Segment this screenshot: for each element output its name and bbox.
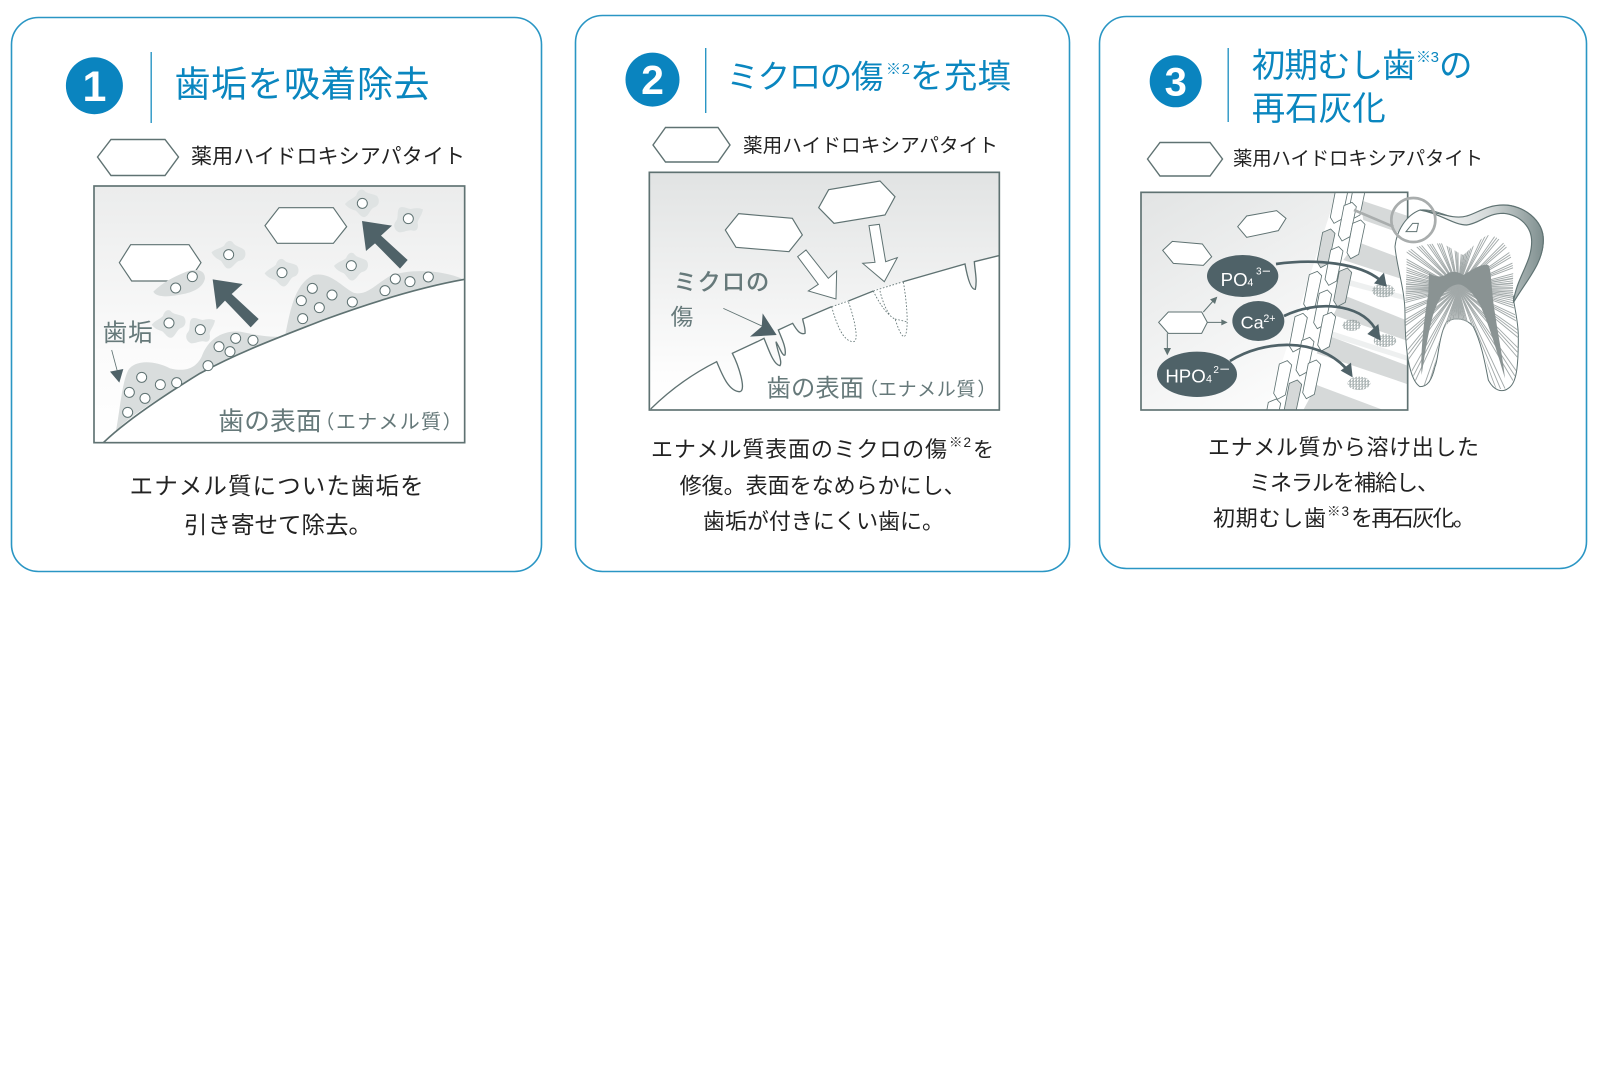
particles 3 [1163, 241, 1212, 265]
enamel with scratches [651, 256, 999, 409]
number badge 3: 3 [1165, 60, 1187, 104]
body text 2: 修復。表面をなめらかにし、 [680, 474, 966, 498]
label: tooth surface: エナメル質 [336, 411, 441, 434]
body text 3: 初期むし歯 [1213, 506, 1326, 531]
legend: hydroxyapatite 3: 薬用ハイドロキシアパタイト [1233, 148, 1483, 170]
pulp [1421, 265, 1505, 378]
particles [725, 214, 802, 252]
filled scratches dotted [832, 282, 907, 342]
label: plaque: 歯垢 [103, 319, 153, 347]
legend: hydroxyapatite 2 [653, 128, 998, 162]
enamel surface [103, 279, 465, 443]
label: tooth surface 2 [767, 376, 996, 403]
diagram: remineralization and tooth [1140, 192, 1544, 411]
heading 3: 初期むし歯 [1252, 48, 1416, 85]
legend: hydroxyapatite 1 [98, 140, 465, 176]
label: tooth surface: ） [443, 412, 462, 434]
panel border 1 [12, 18, 542, 572]
magnifier ring [1354, 198, 1435, 242]
heading 2: ミクロの傷 [726, 59, 884, 95]
curved arrows [1230, 262, 1380, 368]
ion: Ca: 2+ [1263, 313, 1275, 325]
arrow: lift away left [213, 279, 259, 327]
plaque layer [116, 271, 463, 431]
body text 3: エナメル質から溶け出した [1208, 435, 1479, 460]
body text 1: エナメル質についた歯垢を [130, 473, 424, 499]
label: plaque [103, 319, 153, 383]
body text 3: を再石灰化。 [1351, 506, 1475, 531]
heading 2: ※2 [886, 61, 910, 78]
lesion [1406, 223, 1418, 232]
label: micro scratch: 傷 [671, 304, 693, 330]
mineral clusters [1342, 284, 1396, 390]
label: micro scratch: ミクロの [673, 269, 769, 295]
arrow: lift away right [362, 221, 408, 269]
heading divider 2 [705, 48, 706, 113]
particles [265, 208, 347, 243]
heading 3: ※3 [1416, 49, 1439, 66]
number badge 3 [1150, 55, 1202, 107]
label: tooth surface 2: ） [977, 378, 996, 399]
number badge 2: 2 [641, 57, 664, 103]
body text 2: 歯垢が付きにくい歯に。 [703, 509, 944, 534]
panel: 2 micro scratches [576, 16, 1070, 572]
arrow: fill right [863, 224, 897, 282]
diagram: filling scratches [649, 172, 999, 410]
body text 2: ※2 [949, 435, 971, 450]
heading 3: の [1439, 48, 1472, 85]
ion: PO4 [1207, 255, 1278, 297]
body text 2 [651, 435, 994, 534]
panel: 1 plaque removal [12, 18, 542, 572]
thin arrows [1164, 297, 1228, 355]
legend: hydroxyapatite 2: 薬用ハイドロキシアパタイト [743, 135, 998, 157]
label: tooth surface: 歯の表面 [218, 407, 322, 436]
heading 3 [1252, 48, 1472, 128]
surface outline [651, 256, 999, 409]
ion: HPO4: 2 [1213, 365, 1219, 376]
label: tooth surface: （ [315, 412, 334, 434]
number badge 1: 1 [82, 63, 106, 111]
body text 1: 引き寄せて除去。 [184, 512, 372, 538]
label: tooth surface 2: 歯の表面 [767, 376, 864, 403]
panel border 2 [576, 16, 1070, 572]
label: micro scratch [671, 269, 777, 337]
label: tooth surface [218, 407, 462, 436]
ion: PO4: 4 [1247, 277, 1253, 289]
body text 3: ミネラルを補給し、 [1249, 470, 1439, 496]
ion: Ca: Ca [1241, 312, 1264, 332]
body text 3 [1208, 435, 1479, 531]
ion: HPO4: HPO [1165, 365, 1206, 386]
heading 3: 再石灰化 [1252, 91, 1386, 128]
diagram: plaque pulled off enamel [94, 186, 465, 443]
ion: Ca [1232, 301, 1284, 341]
ion: PO4: 3 [1256, 266, 1262, 277]
ion: PO4: PO [1221, 269, 1248, 290]
detached plaque blobs [152, 189, 430, 350]
heading 2 [726, 59, 1011, 96]
arrow: fill left [798, 250, 837, 299]
body text 2: を [973, 439, 994, 462]
dentin tubules [1405, 235, 1518, 390]
ion: HPO4 [1157, 352, 1237, 397]
enamel prisms [1266, 193, 1407, 410]
ion: HPO4: 4 [1206, 373, 1212, 385]
legend: hydroxyapatite 3 [1148, 142, 1483, 176]
number badge 2 [626, 53, 680, 107]
label: tooth surface 2: エナメル質 [878, 378, 975, 400]
heading divider 3 [1228, 48, 1229, 122]
label: tooth surface 2: （ [859, 378, 878, 399]
bacteria circles [123, 198, 433, 417]
heading 1: 歯垢を吸着除去 [174, 64, 430, 104]
panel: 3 remineralization [1100, 16, 1600, 568]
body text 2: エナメル質表面のミクロの傷 [651, 437, 947, 462]
heading divider 1 [150, 52, 152, 123]
heading 2: を充填 [910, 59, 1011, 96]
panel border 3 [1100, 16, 1586, 568]
number badge 1 [66, 57, 123, 114]
tooth illustration [1394, 204, 1544, 392]
enamel crescent [1420, 205, 1543, 303]
body text 1 [130, 473, 424, 538]
body text 3: ※3 [1327, 504, 1349, 519]
legend: hydroxyapatite 1: 薬用ハイドロキシアパタイト [191, 146, 465, 168]
